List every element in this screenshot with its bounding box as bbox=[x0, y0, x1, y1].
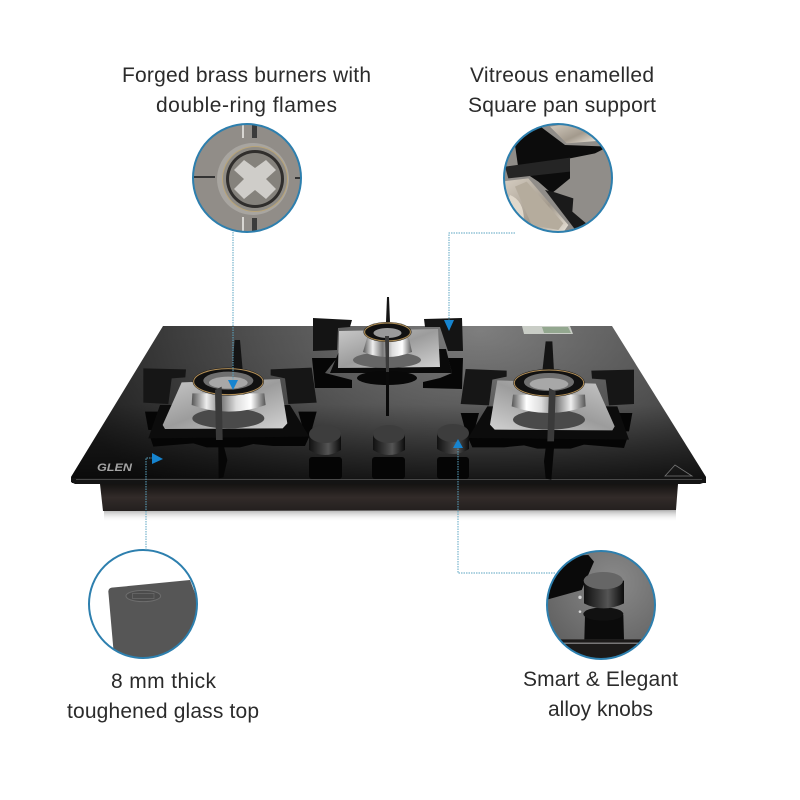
heading: pan support: Vitreous enamelled bbox=[470, 64, 654, 87]
centre burner bbox=[312, 297, 463, 416]
warning triangle mark bbox=[665, 465, 692, 476]
heading: pan support bbox=[468, 64, 656, 117]
detail circle: glass bbox=[89, 550, 207, 663]
callout: knobs bbox=[453, 439, 678, 721]
knob 1 bbox=[309, 425, 342, 479]
infographic bbox=[67, 66, 706, 722]
heading: burners bbox=[122, 64, 371, 117]
arrow: knobs pointer bbox=[453, 439, 555, 573]
arrow: pan support pointer bbox=[444, 233, 515, 331]
left burner bbox=[143, 340, 317, 478]
heading: knobs bbox=[523, 668, 678, 721]
heading: glass top: 8 mm thick bbox=[111, 670, 216, 693]
knob 2 bbox=[372, 425, 405, 479]
heading: pan support: Square pan support bbox=[468, 94, 656, 117]
rating sticker bbox=[522, 326, 573, 334]
heading: glass top: toughened glass top bbox=[67, 700, 259, 723]
detail circle: knob bbox=[546, 550, 656, 660]
arrow: burners pointer bbox=[228, 232, 238, 390]
heading: knobs: alloy knobs bbox=[548, 698, 653, 721]
control knobs bbox=[309, 424, 469, 479]
hob body under the glass bbox=[100, 484, 678, 522]
callout: pan support bbox=[444, 64, 656, 331]
callout: burners bbox=[122, 64, 371, 390]
glass top bbox=[71, 326, 706, 484]
right burner bbox=[461, 341, 634, 480]
brand mark: GLEN bbox=[97, 462, 133, 474]
detail circle: pan support bbox=[503, 123, 613, 233]
heading: burners: Forged brass burners with bbox=[122, 64, 371, 87]
knob 3 bbox=[437, 424, 469, 479]
heading: knobs: Smart & Elegant bbox=[523, 668, 678, 691]
arrow: glass pointer bbox=[146, 453, 163, 550]
hob product image bbox=[71, 297, 706, 522]
heading: glass top bbox=[67, 670, 259, 723]
detail circle: burner bbox=[190, 120, 305, 235]
callout: glass top bbox=[67, 453, 259, 723]
heading: burners: double-ring flames bbox=[156, 94, 337, 117]
